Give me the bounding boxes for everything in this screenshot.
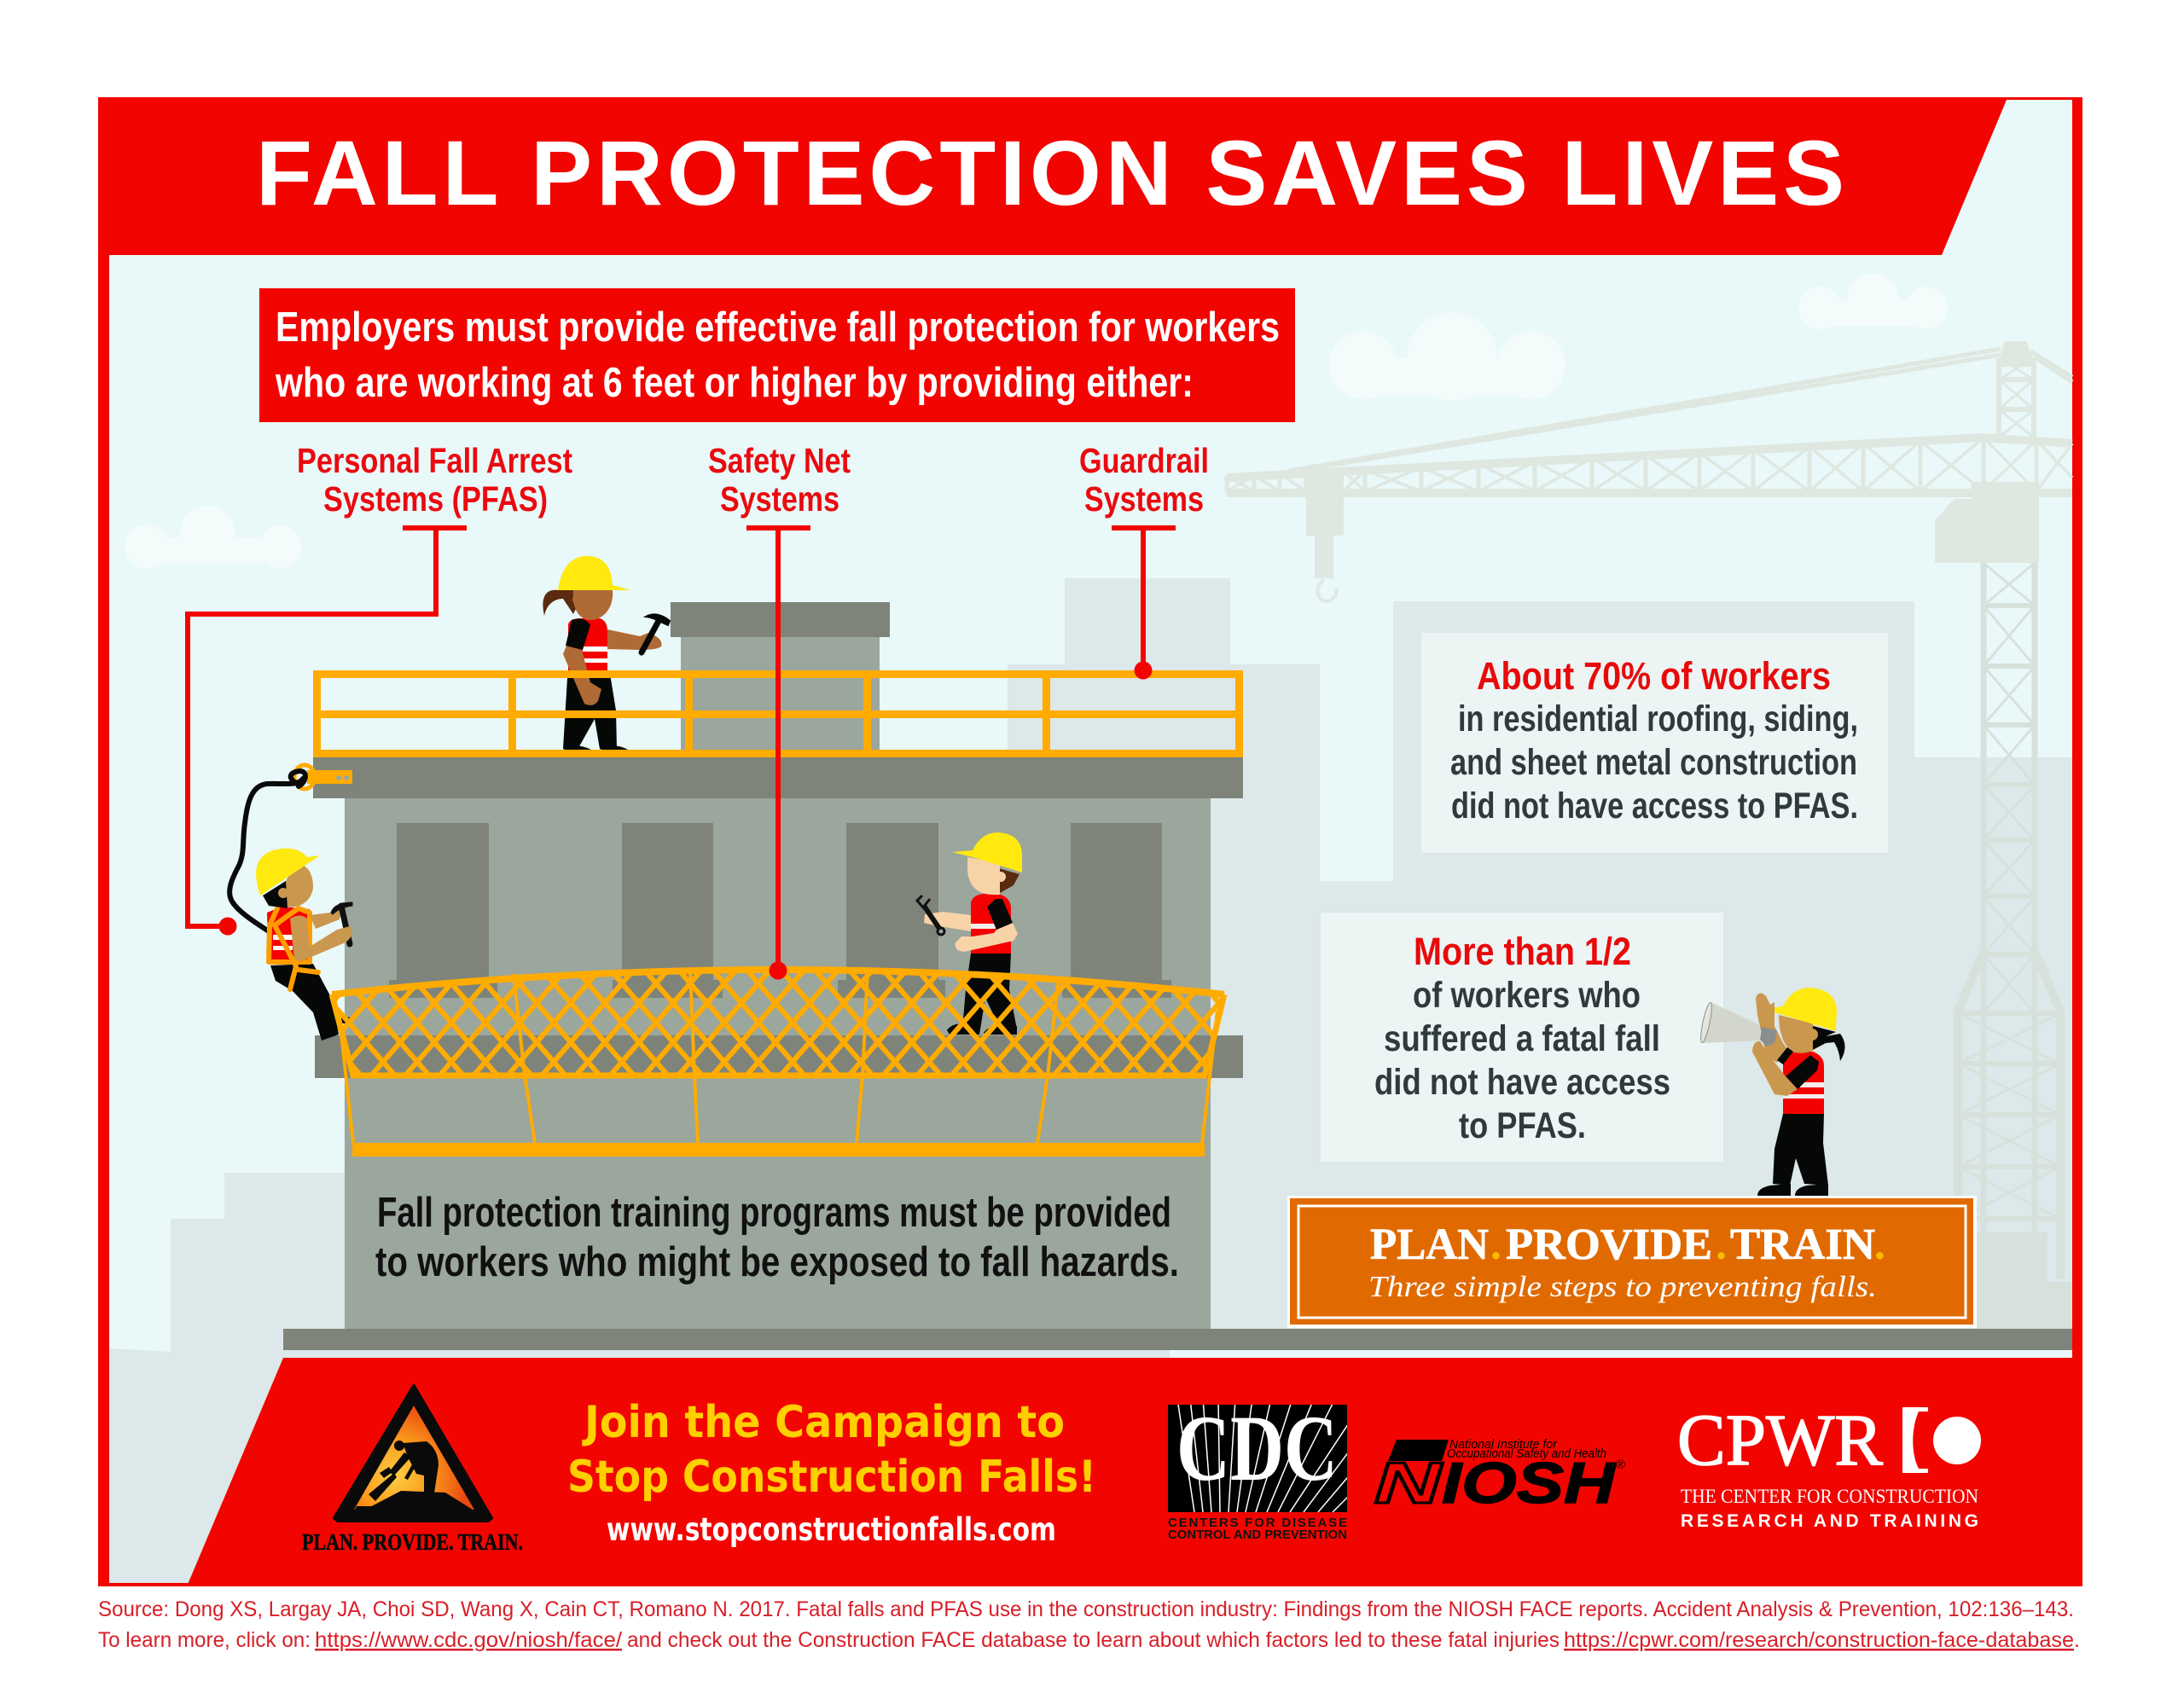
label: safety net: Systems bbox=[720, 479, 839, 519]
source citation: Source: Dong XS, Largay JA, Choi SD, Wang X, Cain CT, Romano N. 2017. Fatal falls and PFAS use in the construction industry: Findings from the NIOSH FACE reports. Accident Analysis & Prevention, 102:136–143. bbox=[98, 1597, 2074, 1621]
source citation: To learn more, click on: bbox=[98, 1628, 311, 1652]
ground slab bbox=[283, 1329, 2072, 1350]
megaphone bbox=[1699, 1002, 1777, 1046]
source citation: and check out the Construction FACE database to learn about which factors led to these fatal injuries bbox=[627, 1628, 1560, 1652]
label: safety net: Safety Net bbox=[708, 441, 851, 480]
NIOSH logo: Occupational Safety and Health bbox=[1447, 1446, 1606, 1461]
crane bbox=[1227, 341, 2072, 1329]
NIOSH logo bbox=[1374, 1437, 1625, 1516]
campaign call to action bbox=[567, 1397, 1096, 1548]
chimney bbox=[671, 602, 890, 752]
building body bbox=[345, 798, 1211, 1331]
slogan bbox=[1370, 1220, 1885, 1269]
employer requirement box: who are working at 6 feet or higher by providing either: bbox=[275, 360, 1194, 406]
building bbox=[283, 602, 2072, 1350]
campaign call to action: Join the Campaign to bbox=[582, 1397, 1065, 1448]
crane mast and ties bbox=[1289, 341, 2072, 471]
callout lines bbox=[188, 528, 1176, 979]
label: guardrail: Guardrail bbox=[1079, 441, 1209, 480]
warning sign logo bbox=[302, 1386, 523, 1555]
source citation: https://cpwr.com/research/construction-face-database bbox=[1564, 1628, 2074, 1652]
slogan: TRAIN bbox=[1730, 1220, 1875, 1269]
roof slab bbox=[313, 757, 1243, 798]
CPWR logo: THE CENTER FOR CONSTRUCTION bbox=[1681, 1486, 1978, 1507]
anchor point bbox=[294, 765, 352, 789]
employer requirement box: Employers must provide effective fall protection for workers bbox=[276, 304, 1280, 351]
campaign call to action: Stop Construction Falls! bbox=[567, 1452, 1096, 1503]
stat panel: more than 1/2: did not have access bbox=[1374, 1062, 1670, 1103]
plan provide train box: Three simple steps to preventing falls. bbox=[1368, 1270, 1877, 1303]
label: safety net bbox=[708, 441, 851, 519]
crane cab bbox=[1935, 482, 2039, 563]
stat panel: about 70%: did not have access to PFAS. bbox=[1451, 786, 1858, 826]
stat panel: more than 1/2 bbox=[1321, 913, 1723, 1162]
slogan: . bbox=[1874, 1220, 1885, 1269]
CDC logo: CENTERS FOR DISEASE bbox=[1168, 1516, 1347, 1530]
guardrail bbox=[313, 670, 1243, 757]
plan provide train box bbox=[1287, 1196, 1977, 1328]
NIOSH logo: ® bbox=[1616, 1458, 1625, 1472]
CDC logo: CONTROL AND PREVENTION bbox=[1168, 1528, 1347, 1542]
CPWR logo: RESEARCH AND TRAINING bbox=[1681, 1511, 1978, 1531]
slogan: . bbox=[1490, 1220, 1502, 1269]
crane tower bbox=[1958, 563, 2060, 1279]
slogan: PLAN bbox=[1370, 1220, 1489, 1269]
bottom campaign band bbox=[187, 1350, 2082, 1586]
label: guardrail bbox=[1079, 441, 1209, 519]
campaign call to action: www.stopconstructionfalls.com bbox=[607, 1511, 1056, 1548]
clouds bbox=[125, 273, 1948, 569]
guardrail callout line bbox=[1112, 528, 1176, 679]
training text: to workers who might be exposed to fall hazards. bbox=[375, 1239, 1179, 1285]
warning sign logo: PLAN. PROVIDE. TRAIN. bbox=[302, 1529, 523, 1555]
CDC logo: CDC bbox=[1176, 1396, 1338, 1500]
stat panel: more than 1/2: More than 1/2 bbox=[1414, 930, 1631, 973]
source citation: https://www.cdc.gov/niosh/face/ bbox=[315, 1628, 622, 1652]
background skyline bbox=[109, 578, 2072, 1583]
PFAS callout line bbox=[188, 528, 467, 935]
safety net bbox=[332, 970, 1224, 1157]
source citation bbox=[98, 1597, 2080, 1652]
stat panel: more than 1/2: of workers who bbox=[1413, 975, 1641, 1016]
slogan: PROVIDE bbox=[1506, 1220, 1712, 1269]
NIOSH logo: IOSH bbox=[1442, 1451, 1617, 1516]
CPWR logo bbox=[1677, 1399, 1981, 1531]
stat panel: about 70%: in residential roofing, siding, bbox=[1458, 699, 1858, 739]
label: PFAS: Personal Fall Arrest bbox=[297, 441, 572, 480]
stat panel: more than 1/2: suffered a fatal fall bbox=[1384, 1018, 1660, 1059]
crane trolley and hook bbox=[1306, 472, 1344, 601]
crane base bbox=[1977, 1232, 2072, 1329]
source citation: . bbox=[2074, 1628, 2080, 1652]
stat panel: about 70% bbox=[1421, 633, 1888, 853]
worker: harness at roof edge bbox=[229, 765, 352, 1041]
worker: with megaphone bbox=[1699, 988, 1844, 1196]
stat panel: more than 1/2: to PFAS. bbox=[1459, 1105, 1586, 1146]
CPWR logo: CPWR bbox=[1677, 1399, 1884, 1481]
middle slab bbox=[315, 1035, 1243, 1078]
CDC logo bbox=[1168, 1405, 1347, 1539]
stat panel: about 70%: About 70% of workers bbox=[1477, 654, 1831, 698]
lanyard bbox=[229, 771, 305, 933]
crane jib bbox=[1227, 438, 2072, 493]
training text bbox=[375, 1190, 1179, 1285]
training text: Fall protection training programs must be provided bbox=[377, 1190, 1171, 1236]
worker: top with hammer bbox=[543, 556, 670, 750]
safety net callout line bbox=[746, 528, 810, 979]
label: PFAS bbox=[297, 441, 572, 519]
windows bbox=[389, 823, 1171, 998]
label: PFAS: Systems (PFAS) bbox=[323, 479, 548, 519]
stat panel: about 70%: and sheet metal construction bbox=[1450, 742, 1857, 783]
NIOSH logo: National Institute for bbox=[1449, 1437, 1558, 1452]
harness bbox=[269, 908, 318, 989]
slogan: . bbox=[1716, 1220, 1727, 1269]
NIOSH logo: N bbox=[1374, 1451, 1443, 1516]
title banner bbox=[109, 100, 2007, 255]
silhouette of roofer bbox=[355, 1441, 473, 1510]
label: guardrail: Systems bbox=[1084, 479, 1204, 519]
worker: on middle floor with wrench bbox=[917, 832, 1022, 1035]
title banner: FALL PROTECTION SAVES LIVES bbox=[256, 121, 1844, 224]
employer requirement box bbox=[259, 288, 1295, 422]
